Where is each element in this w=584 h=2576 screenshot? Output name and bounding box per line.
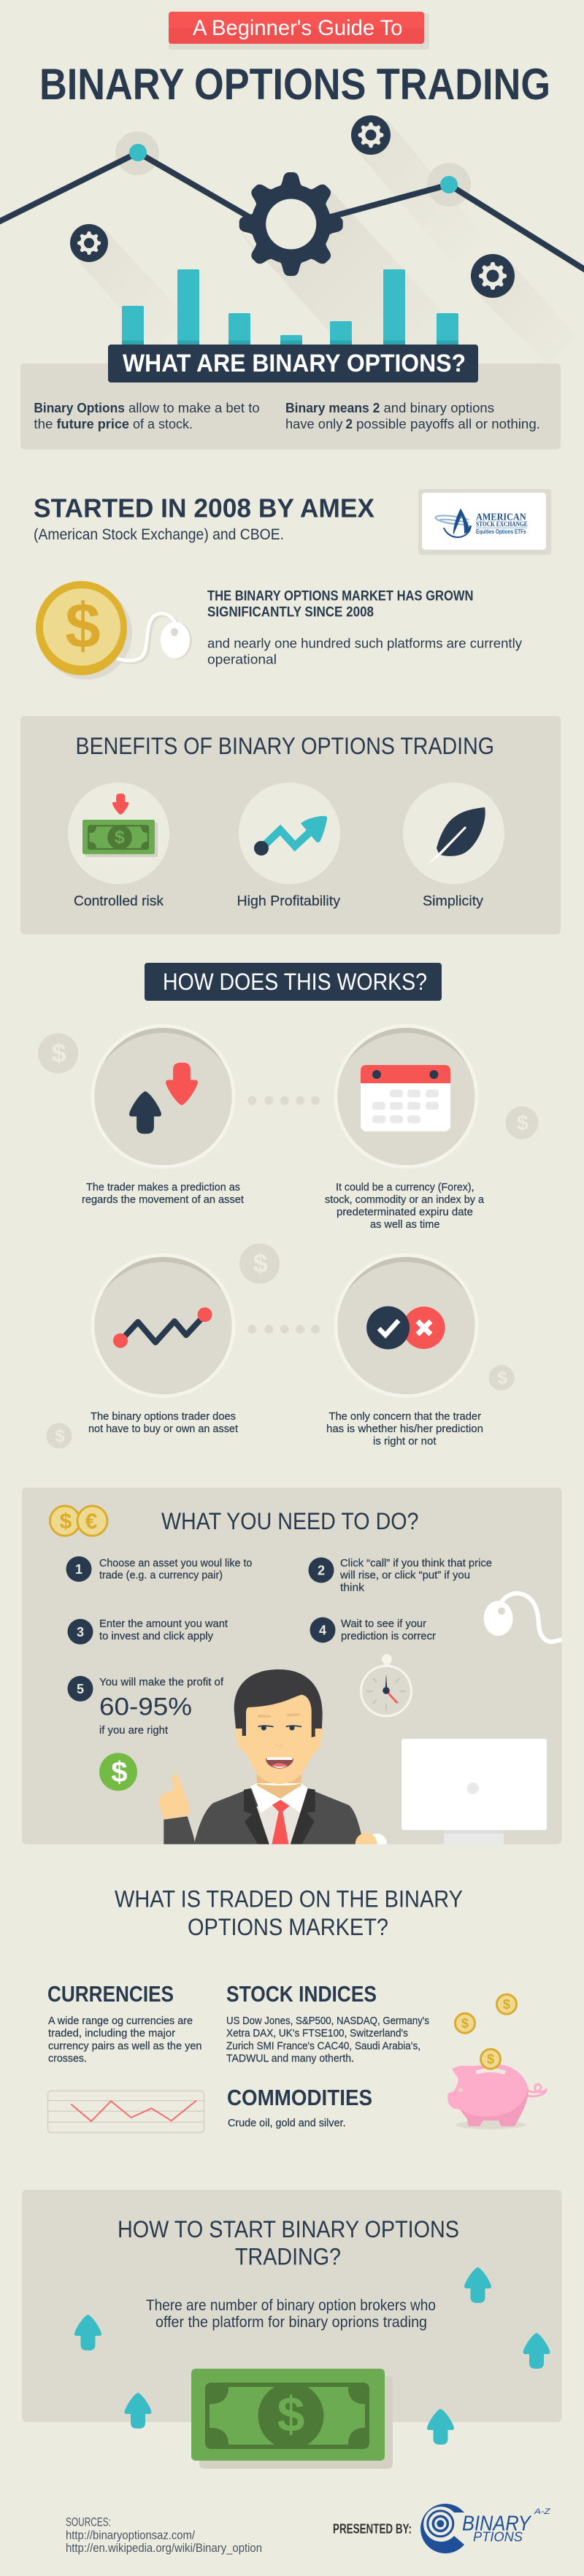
step: no need to own xyxy=(88,1253,239,1435)
benefit: controlled risk xyxy=(68,783,169,910)
heading: how does this works: HOW DOES THIS WORKS? xyxy=(163,969,427,995)
decorative dollar coins: $ xyxy=(517,1112,529,1135)
step: calendar: stock, commodity or an index by a xyxy=(325,1193,485,1206)
heading: what are binary options: WHAT ARE BINARY OPTIONS? xyxy=(123,350,466,377)
decorative dollar coins: $ xyxy=(52,1038,66,1068)
block: currencies: CURRENCIES xyxy=(47,1981,174,2007)
step: calendar xyxy=(325,1024,485,1231)
text: sources: http://en.wikipedia.org/wiki/Binary_option xyxy=(66,2541,262,2555)
step: prediction: regards the movement of an asset xyxy=(82,1193,245,1206)
step: no need to own: not have to buy or own an asset xyxy=(88,1423,239,1435)
step: no need to own: The binary options trader does xyxy=(91,1410,236,1423)
heading: how to start: TRADING? xyxy=(235,2244,341,2270)
illustration: banknote: $ xyxy=(277,2387,304,2442)
step 5 xyxy=(67,1676,224,1737)
decorative dollar coins: $ xyxy=(497,1368,507,1388)
chart: small line chart xyxy=(48,2091,204,2133)
step 2: think xyxy=(340,1582,365,1594)
face xyxy=(236,1693,322,1784)
panel: what you need to do xyxy=(22,1488,566,1855)
logo: american stock exchange: STOCK EXCHANGE xyxy=(476,521,528,528)
text: right definition: possible payoffs all or nothing. xyxy=(356,417,540,431)
icon: gold coin with mouse: $ xyxy=(65,591,101,661)
logo: binary options a-z xyxy=(420,2504,551,2553)
step 1: trade (e.g. a currency pair) xyxy=(99,1569,223,1582)
step: calendar: as well as time xyxy=(370,1218,439,1231)
panel: benefits xyxy=(20,716,561,934)
step 4: 4 xyxy=(319,1623,326,1638)
logo: binary options a-z: BINARY xyxy=(462,2512,532,2536)
block: stock indices: Zurich SMI France's CAC40, Saudi Arabia's, xyxy=(226,2039,420,2052)
line chart nodes xyxy=(0,131,584,276)
icon: green dollar xyxy=(99,1753,137,1791)
decorative dollar coins: $ xyxy=(253,1248,268,1278)
illustration: businessman xyxy=(158,1669,387,1855)
block: currencies: currency pairs as well as the yen xyxy=(48,2039,201,2052)
block: stock indices: STOCK INDICES xyxy=(226,1981,377,2007)
connector dots row 1 xyxy=(247,1096,320,1105)
text: presented by: PRESENTED BY: xyxy=(333,2522,412,2537)
step: calendar: predeterminated expiru date xyxy=(337,1206,473,1218)
step: right or not: is right or not xyxy=(373,1435,437,1447)
block: currencies: A wide range og currencies are xyxy=(48,2015,193,2027)
icon: piggy bank with coins: $ xyxy=(503,1997,510,2012)
step 4: prediction is correcr xyxy=(341,1630,436,1642)
step 1 xyxy=(66,1556,252,1582)
block: stock indices xyxy=(226,1981,429,2064)
icon: small gear right xyxy=(471,254,515,298)
text: american stock exchange: (American Stock Exchange) and CBOE. xyxy=(34,526,284,543)
illustration: banknote xyxy=(191,2369,393,2469)
step: prediction xyxy=(82,1024,245,1206)
step 5: if you are right xyxy=(99,1724,169,1737)
heading: how to start: HOW TO START BINARY OPTIONS xyxy=(118,2216,459,2242)
heading: what you need to do: WHAT YOU NEED TO DO? xyxy=(161,1508,419,1534)
bar chart xyxy=(122,269,458,345)
text: market growth: THE BINARY OPTIONS MARKET HAS GROWN xyxy=(207,588,473,604)
panel: how to start xyxy=(22,2190,562,2422)
step 2: Click “call” if you think that price xyxy=(340,1557,492,1569)
text: right definition xyxy=(285,401,540,431)
icons: rising teal arrows xyxy=(74,2267,550,2445)
icon: dollar and euro coins: $ xyxy=(60,1510,72,1534)
text: market growth: and nearly one hundred such platforms are currently xyxy=(207,637,522,651)
text: left definition: Binary Options xyxy=(34,401,125,415)
block: stock indices: US Dow Jones, S&P500, NASDAQ, Germany's xyxy=(226,2015,429,2027)
step 2: will rise, or click “put” if you xyxy=(339,1569,470,1582)
text: right definition: and binary options xyxy=(384,401,494,415)
step 2: 2 xyxy=(318,1564,325,1578)
icon: green dollar: $ xyxy=(111,1756,128,1788)
step 2 xyxy=(308,1557,492,1594)
text: right definition: 2 xyxy=(346,417,353,431)
text: left definition: allow to make a bet to xyxy=(128,401,260,415)
icon: piggy bank with coins xyxy=(447,1994,546,2129)
logo: binary options a-z: A-Z xyxy=(534,2507,551,2516)
step: right or not: The only concern that the trader xyxy=(328,1410,481,1423)
icon: dollar and euro coins xyxy=(50,1506,107,1536)
banner: A Beginner's Guide To: A Beginner's Guide To xyxy=(193,16,403,40)
heading: started in 2008: STARTED IN 2008 BY AMEX xyxy=(34,493,374,523)
step: right or not xyxy=(326,1253,483,1447)
heading: what are binary options xyxy=(108,345,478,382)
illustration: monitor xyxy=(402,1739,547,1844)
step 3 xyxy=(67,1618,228,1645)
heading: what is traded: WHAT IS TRADED ON THE BINARY xyxy=(115,1886,463,1912)
text: left definition: future price xyxy=(57,417,129,431)
benefit: controlled risk: $ xyxy=(115,827,125,847)
text: market growth: operational xyxy=(207,653,277,667)
benefit: simplicity xyxy=(403,783,504,910)
step 1: Choose an asset you woul like to xyxy=(99,1557,252,1569)
text: brokers: There are number of binary option brokers who xyxy=(146,2297,436,2314)
logo: american stock exchange: AMERICAN xyxy=(476,512,526,523)
text: left definition: of a stock. xyxy=(133,417,193,431)
step: prediction: The trader makes a prediction as xyxy=(86,1181,240,1193)
connector dots row 2 xyxy=(247,1325,320,1334)
text: left definition: the xyxy=(34,417,53,431)
text: market growth xyxy=(207,588,522,667)
panel: what are binary options xyxy=(20,345,561,450)
block: commodities: COMMODITIES xyxy=(227,2085,372,2110)
heading: what is traded xyxy=(115,1886,463,1940)
icon: piggy bank with coins: $ xyxy=(487,2052,494,2066)
banner: A Beginner's Guide To xyxy=(169,12,429,50)
step: right or not: has is whether his/her prediction xyxy=(326,1423,483,1435)
heading: how does this works xyxy=(145,963,442,1001)
block: stock indices: Xetra DAX, UK's FTSE100, Switzerland's xyxy=(226,2027,408,2039)
benefit: high profitability xyxy=(237,783,341,910)
icon: stopwatch xyxy=(360,1654,412,1717)
step 4 xyxy=(310,1618,436,1642)
step 3: Enter the amount you want xyxy=(99,1618,228,1630)
hero illustration: line chart, gears and bars xyxy=(0,115,584,365)
benefit: high profitability: High Profitability xyxy=(237,894,341,910)
text: left definition xyxy=(34,401,260,431)
text: sources xyxy=(66,2515,262,2555)
block: commodities: Crude oil, gold and silver. xyxy=(228,2117,346,2129)
text: sources: SOURCES: xyxy=(66,2515,111,2529)
text: right definition: have only xyxy=(285,417,342,431)
suit xyxy=(193,1788,364,1847)
heading: what is traded: OPTIONS MARKET? xyxy=(188,1914,388,1940)
heading: how to start xyxy=(118,2216,459,2270)
text: brokers xyxy=(146,2297,436,2331)
block: stock indices: TADWUL and many otherth. xyxy=(226,2052,354,2064)
icon: white mouse xyxy=(484,1593,566,1642)
benefit: simplicity: Simplicity xyxy=(423,894,484,910)
step 3: to invest and click apply xyxy=(99,1630,213,1642)
text: market growth: SIGNIFICANTLY SINCE 2008 xyxy=(207,605,374,620)
text: sources: http://binaryoptionsaz.com/ xyxy=(66,2528,195,2542)
step: calendar: It could be a currency (Forex), xyxy=(336,1181,474,1193)
step 4: Wait to see if your xyxy=(341,1618,426,1630)
step 5: 5 xyxy=(77,1682,84,1696)
text: brokers: offer the platform for binary oprions trading xyxy=(155,2314,427,2331)
text: right definition: Binary means 2 xyxy=(285,401,380,415)
step 5: 60-95% xyxy=(99,1693,192,1721)
icon: dollar and euro coins: € xyxy=(85,1510,98,1534)
block: currencies: crosses. xyxy=(48,2052,87,2064)
block: currencies: traded, including the major xyxy=(48,2027,175,2039)
step 1: 1 xyxy=(75,1562,82,1577)
heading: benefits: BENEFITS OF BINARY OPTIONS TRADING xyxy=(76,733,494,759)
icon: large gear xyxy=(239,172,343,276)
icon: small gear top xyxy=(351,115,391,155)
block: currencies xyxy=(47,1981,201,2064)
step 5: You will make the profit of xyxy=(99,1676,224,1688)
benefit: controlled risk: Controlled risk xyxy=(74,894,164,910)
block: commodities xyxy=(227,2085,372,2129)
logo: binary options a-z: PTIONS xyxy=(473,2530,523,2545)
icon: small gear left xyxy=(70,224,108,262)
logo: american stock exchange xyxy=(418,489,551,555)
decorative dollar coins: $ xyxy=(55,1426,65,1446)
logo: american stock exchange: Equities Options ETFs xyxy=(476,528,526,535)
step 3: 3 xyxy=(77,1625,84,1639)
icon: piggy bank with coins: $ xyxy=(461,2016,469,2031)
raised hand xyxy=(164,1816,196,1847)
decorative dollar coins xyxy=(38,1034,539,1448)
icon: gold coin with mouse xyxy=(36,581,192,680)
